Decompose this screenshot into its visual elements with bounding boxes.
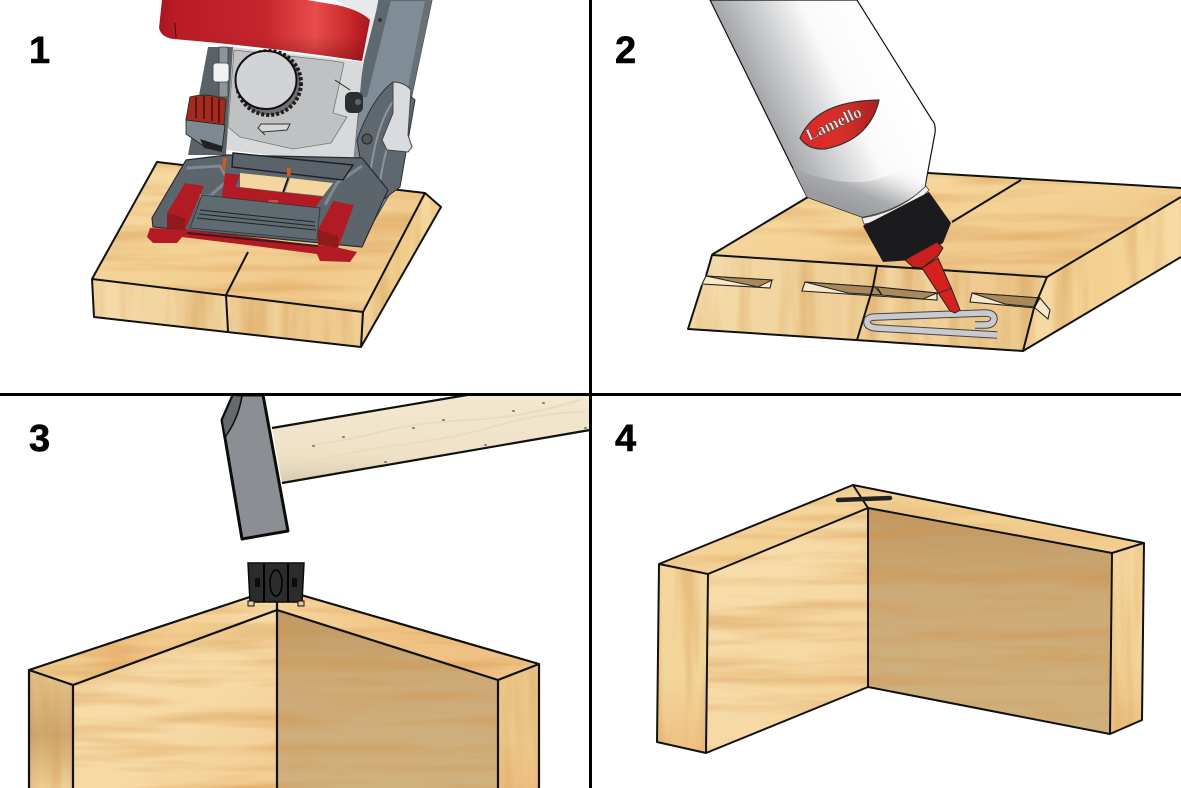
centre bar	[190, 195, 320, 240]
wood board, step 1	[92, 162, 441, 347]
panel 3: hammer and clip	[29, 395, 590, 788]
bottle body	[710, 0, 935, 217]
biscuit glue groove	[867, 313, 997, 335]
neck rings	[862, 186, 929, 224]
wood corner, step 3	[29, 588, 539, 788]
red guide plate	[222, 173, 323, 208]
base frame	[152, 155, 388, 247]
wood corner, step 4	[657, 485, 1144, 753]
flush clip	[838, 498, 890, 500]
Lamello label: Lamello	[803, 102, 865, 145]
hammer	[222, 395, 590, 539]
red end caps	[167, 183, 354, 248]
panel 2: glue bottle	[615, 0, 1181, 351]
red base plate	[147, 228, 357, 262]
red nozzle	[905, 242, 960, 313]
depth rod and white collar	[213, 47, 229, 97]
black cap	[863, 192, 951, 262]
rotation arrow	[258, 124, 290, 135]
panel 4: finished corner	[615, 418, 1144, 753]
biscuit joiner machine	[147, 0, 432, 262]
step number 4: 4	[615, 418, 636, 460]
step number 1: 1	[29, 30, 50, 72]
red adjusting knob	[186, 95, 226, 152]
red hood	[159, 0, 370, 61]
silver top strip	[335, 0, 379, 60]
side fence arch and lever	[357, 82, 415, 205]
hammer handle	[272, 395, 590, 483]
slot 1	[702, 276, 772, 288]
black locking knob	[345, 92, 363, 113]
hammer head	[222, 395, 288, 539]
glue bottle	[710, 0, 960, 313]
Lamello label	[800, 100, 879, 149]
silver body	[227, 47, 363, 165]
wood board with slots, step 2	[688, 173, 1181, 351]
dial	[236, 51, 301, 115]
step number 2: 2	[615, 30, 636, 72]
slot 3	[970, 293, 1050, 319]
step number 3: 3	[29, 418, 50, 460]
plastic clip	[248, 563, 304, 606]
panel 1: biscuit joiner on wood	[29, 0, 441, 347]
machine column	[352, 0, 432, 240]
slot 2	[802, 282, 937, 300]
